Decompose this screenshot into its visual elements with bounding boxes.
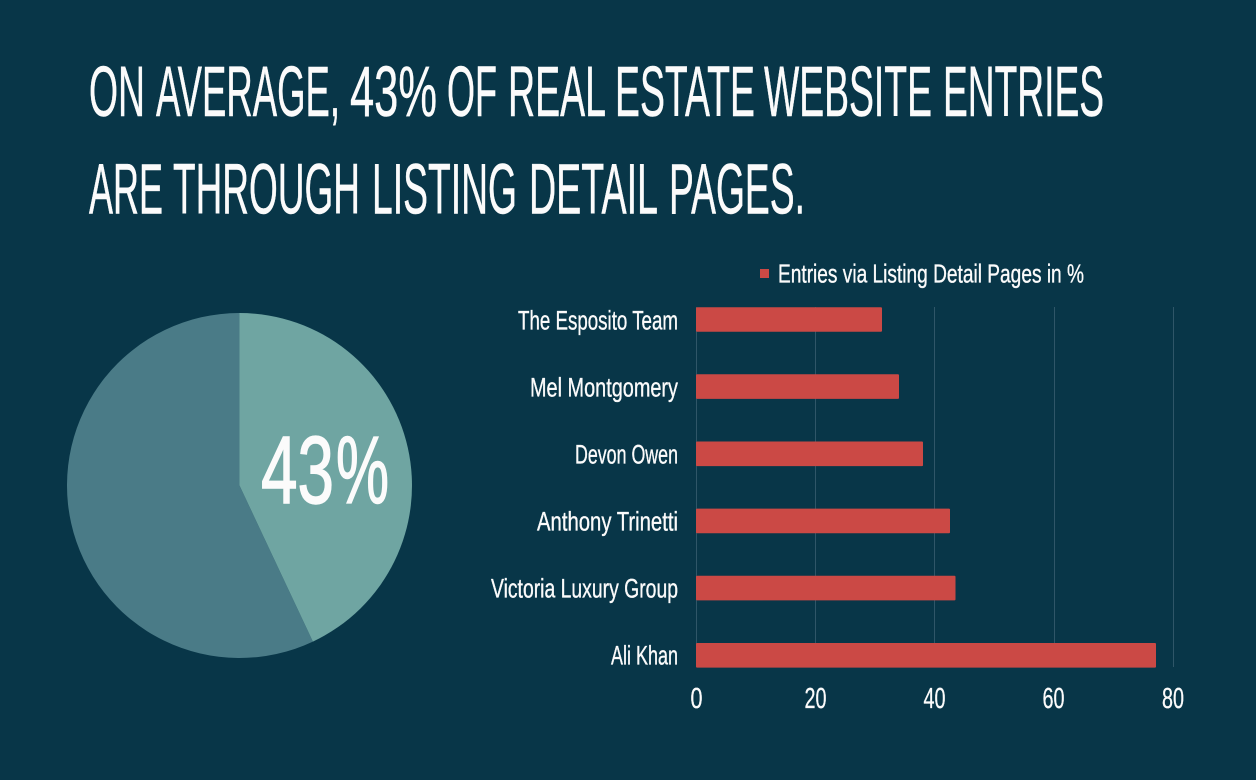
pie value label: %	[336, 417, 389, 524]
title: OF	[447, 53, 497, 132]
axis tick labels	[690, 683, 1184, 715]
title: DETAIL	[529, 150, 658, 230]
category labels: Mel Montgomery	[530, 372, 678, 402]
category labels: Anthony Trinetti	[537, 506, 678, 536]
category labels: Devon Owen	[575, 440, 678, 470]
title: 43%	[350, 53, 437, 132]
axis tick labels: 60	[1042, 683, 1064, 715]
pie chart: 43 percent share	[67, 313, 412, 658]
category labels	[491, 306, 678, 670]
category labels: The Esposito Team	[518, 306, 678, 336]
title	[89, 53, 1104, 230]
axis tick labels: 0	[690, 683, 702, 715]
pie value label: 43	[261, 417, 334, 524]
grid lines	[696, 307, 1174, 667]
axis tick labels: 40	[924, 683, 946, 715]
title: AVERAGE,	[156, 53, 340, 132]
pie slice: 43 percent	[240, 313, 412, 642]
axis tick labels: 80	[1162, 683, 1184, 715]
title: ESTATE	[615, 53, 755, 132]
bars	[696, 307, 1156, 668]
category labels: Ali Khan	[611, 640, 678, 670]
title: PAGES.	[669, 150, 805, 230]
title: WEBSITE	[764, 53, 932, 132]
legend: Entries via Listing Detail Pages in %	[778, 258, 1084, 288]
title: LISTING	[372, 150, 517, 230]
title: REAL	[508, 53, 606, 132]
title: ON	[89, 53, 145, 132]
title: THROUGH	[173, 150, 360, 230]
axis tick labels: 20	[804, 683, 826, 715]
title: ARE	[89, 150, 163, 230]
title: ENTRIES	[943, 53, 1104, 132]
bar chart: entries via listing detail pages	[491, 258, 1184, 715]
category labels: Victoria Luxury Group	[491, 574, 678, 604]
pie slice: remaining 57 percent	[67, 313, 313, 658]
